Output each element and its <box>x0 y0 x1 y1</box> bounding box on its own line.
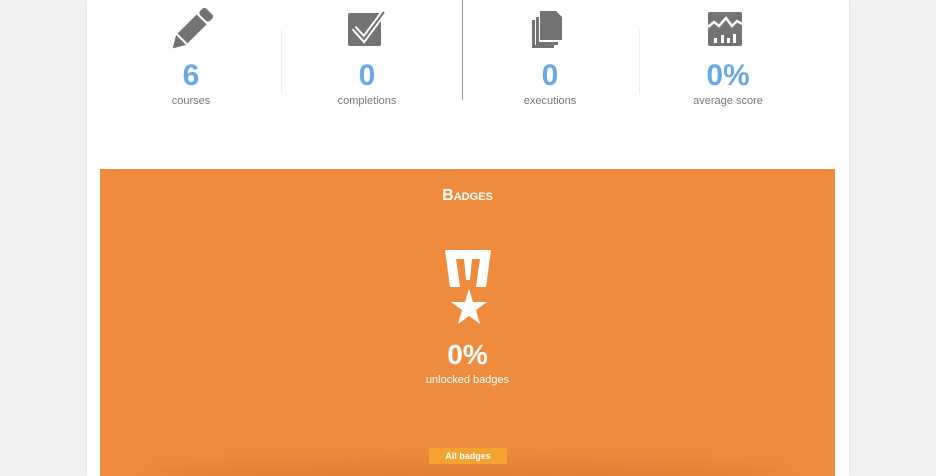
panel: badges <box>100 169 835 476</box>
button: all badges: All badges <box>445 451 491 461</box>
stat: courses: 6 <box>183 59 199 92</box>
stat: average score <box>693 12 763 107</box>
icon: pencil <box>172 8 213 48</box>
bottom shadow <box>150 465 785 476</box>
value: 0% <box>447 339 488 370</box>
stat: average score: average score <box>693 95 763 107</box>
stat: completions <box>338 11 396 107</box>
icon: checkbox <box>348 11 385 46</box>
stat: courses: courses <box>172 95 210 107</box>
heading: Badges <box>442 187 493 204</box>
icon: medal <box>445 250 491 324</box>
stat: completions: 0 <box>359 59 375 92</box>
stat: executions: 0 <box>542 59 558 92</box>
stat: executions: executions <box>524 95 576 107</box>
stat: average score: 0% <box>706 59 750 92</box>
label: unlocked badges <box>426 374 509 386</box>
stat: executions <box>524 11 576 107</box>
icon: documents <box>532 11 562 48</box>
button: all badges <box>429 448 507 464</box>
divider line <box>462 0 463 100</box>
stat: courses <box>172 8 213 107</box>
icon: chart <box>708 12 742 46</box>
stat: completions: completions <box>338 95 396 107</box>
